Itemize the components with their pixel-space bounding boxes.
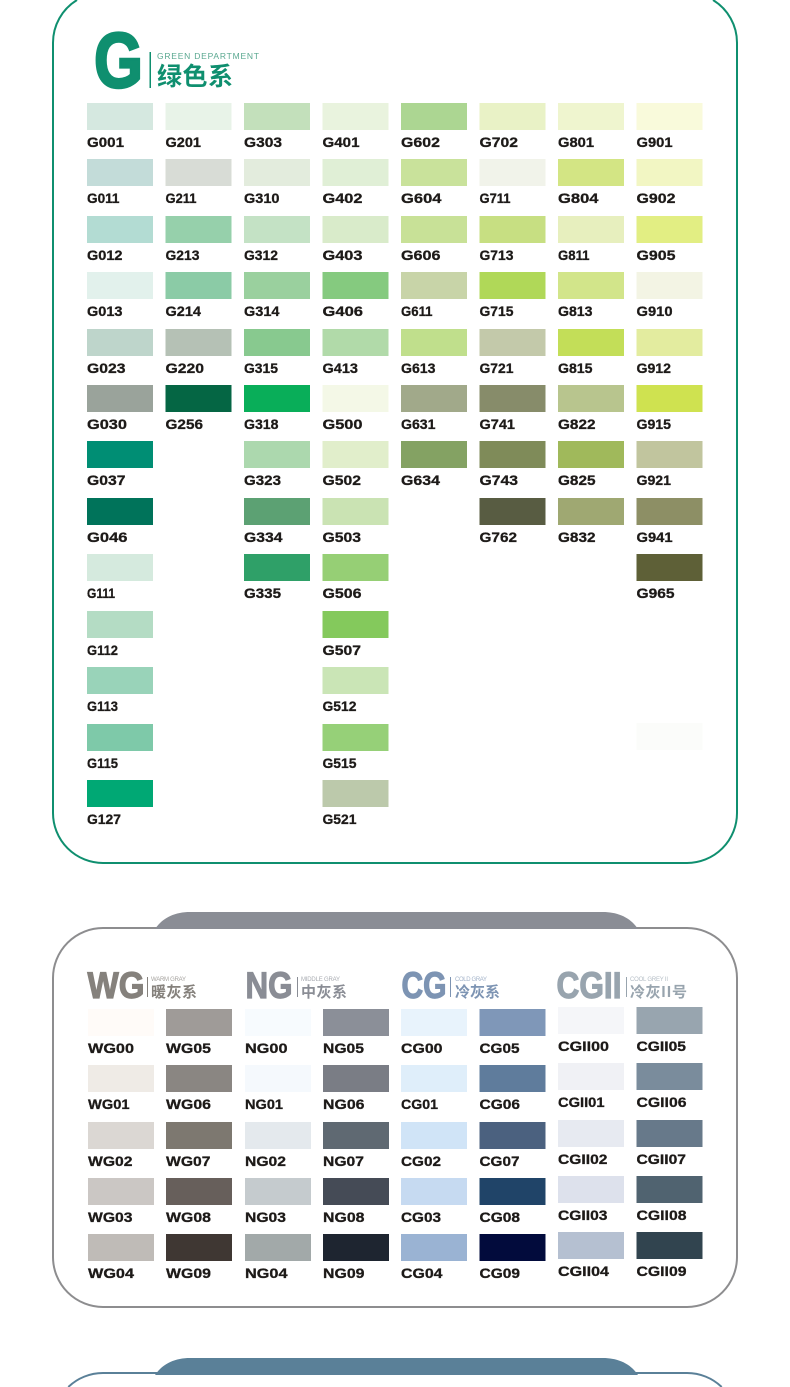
swatch G030: G030	[87, 416, 127, 432]
swatch CG03	[401, 1178, 467, 1225]
swatch CG02: CG02	[401, 1153, 441, 1169]
swatch G013: G013	[87, 303, 123, 319]
swatch G941: G941	[636, 529, 673, 545]
swatch NG03	[245, 1178, 311, 1225]
swatch NG00	[245, 1009, 311, 1056]
swatch G521: G521	[322, 811, 357, 827]
swatch G804: G804	[558, 190, 599, 206]
swatch G335	[244, 554, 310, 601]
swatch WG09	[166, 1234, 232, 1281]
swatch CGII02: CGII02	[558, 1151, 608, 1167]
heading: green department: GREEN DEPARTMENT	[157, 51, 259, 61]
swatch CG00: CG00	[401, 1040, 443, 1056]
swatch NG05: NG05	[323, 1040, 364, 1056]
swatch G037: G037	[87, 472, 126, 488]
swatch G001	[87, 103, 153, 150]
swatch G046	[87, 498, 153, 545]
swatch CGII03: CGII03	[558, 1207, 608, 1223]
swatch G314: G314	[244, 303, 280, 319]
swatch G507	[322, 611, 388, 658]
swatch CGII09: CGII09	[636, 1263, 687, 1279]
swatch CG08	[480, 1178, 546, 1225]
heading: cool grey II	[556, 965, 687, 1006]
swatch G602: G602	[401, 134, 440, 150]
swatch G713	[480, 216, 546, 263]
swatch CG08: CG08	[480, 1209, 520, 1225]
swatch WG03	[88, 1178, 154, 1225]
swatch G406	[322, 272, 388, 319]
swatch WG00	[88, 1009, 154, 1056]
swatch G403	[322, 216, 388, 263]
swatch NG04	[245, 1234, 311, 1281]
swatch G318: G318	[244, 416, 279, 432]
swatch G001: G001	[87, 134, 124, 150]
swatch WG02: WG02	[88, 1153, 133, 1169]
swatch CGII04: CGII04	[558, 1263, 609, 1279]
swatch CGII00	[558, 1007, 624, 1054]
swatch G702	[480, 103, 546, 150]
swatch G901	[636, 103, 702, 150]
swatch G832: G832	[558, 529, 596, 545]
swatch G711: G711	[480, 190, 511, 206]
swatch WG00: WG00	[88, 1040, 134, 1056]
swatch G220	[166, 329, 232, 376]
swatch NG01	[245, 1065, 311, 1112]
swatch G500: G500	[322, 416, 363, 432]
swatch NG09	[323, 1234, 389, 1281]
swatch CGII06: CGII06	[636, 1094, 687, 1110]
swatch G811	[558, 216, 624, 263]
swatch G825	[558, 441, 624, 488]
swatch NG07: NG07	[323, 1153, 364, 1169]
heading: warm gray: WARM GRAY	[151, 977, 186, 983]
swatch CG07	[480, 1122, 546, 1169]
swatch NG08: NG08	[323, 1209, 365, 1225]
swatch G832	[558, 498, 624, 545]
swatch G012: G012	[87, 247, 123, 263]
heading: cold gray	[402, 965, 500, 1006]
heading: warm gray: 暖灰系	[151, 981, 197, 1002]
swatch G915: G915	[636, 416, 671, 432]
swatch WG01: WG01	[88, 1096, 130, 1112]
heading: cold gray: COLD GRAY	[455, 977, 487, 983]
swatch CGII01	[558, 1063, 624, 1110]
swatch G046: G046	[87, 529, 128, 545]
swatch G506	[322, 554, 388, 601]
swatch CG05: CG05	[480, 1040, 520, 1056]
swatch G112	[87, 611, 153, 658]
panel: next section, cropped at page bottom	[68, 1358, 722, 1387]
swatch G965: G965	[636, 585, 675, 601]
swatch G813: G813	[558, 303, 593, 319]
swatch G611	[401, 272, 467, 319]
swatch G910	[636, 272, 702, 319]
swatch WG06	[166, 1065, 232, 1112]
swatch G521	[322, 780, 388, 827]
swatch G030	[87, 385, 153, 432]
swatch G113: G113	[87, 698, 118, 714]
swatch G910: G910	[636, 303, 673, 319]
swatch G606: G606	[401, 247, 441, 263]
heading: green department	[94, 16, 259, 104]
swatch G213: G213	[166, 247, 200, 263]
swatch G312	[244, 216, 310, 263]
swatch G715: G715	[480, 303, 514, 319]
heading: cool grey II: CGII	[556, 965, 622, 1006]
swatch WG08: WG08	[166, 1209, 211, 1225]
swatch G502	[322, 441, 388, 488]
swatch G211: G211	[166, 190, 197, 206]
swatch G413	[322, 329, 388, 376]
swatch G901: G901	[636, 134, 673, 150]
swatch G905: G905	[636, 247, 676, 263]
swatch WG02	[88, 1122, 154, 1169]
swatch CG06: CG06	[480, 1096, 520, 1112]
swatch G503	[322, 498, 388, 545]
heading: middle gray: NG	[246, 965, 292, 1006]
swatch G743	[480, 441, 546, 488]
swatch G721	[480, 329, 546, 376]
swatch G214: G214	[166, 303, 201, 319]
swatch G502: G502	[322, 472, 361, 488]
swatch G303: G303	[244, 134, 282, 150]
swatch G815: G815	[558, 360, 593, 376]
swatch G011: G011	[87, 190, 120, 206]
swatch G318	[244, 385, 310, 432]
swatch CGII08: CGII08	[636, 1207, 687, 1223]
swatch G127	[87, 780, 153, 827]
panel: green department	[53, 0, 737, 863]
heading: cool grey II: 冷灰II号	[630, 981, 687, 1002]
swatch CGII05	[636, 1007, 702, 1054]
swatch WG08	[166, 1178, 232, 1225]
swatch G902: G902	[636, 190, 676, 206]
swatch G721: G721	[480, 360, 514, 376]
swatch G023	[87, 329, 153, 376]
swatch CG06	[480, 1065, 546, 1112]
swatch CG00	[401, 1009, 467, 1056]
swatch G403: G403	[322, 247, 363, 263]
swatch G902	[636, 159, 702, 206]
heading: middle gray: 中灰系	[301, 981, 347, 1002]
swatch G334: G334	[244, 529, 283, 545]
swatch G012	[87, 216, 153, 263]
swatch G314	[244, 272, 310, 319]
swatch WG01	[88, 1065, 154, 1112]
swatch NG01: NG01	[245, 1096, 283, 1112]
swatch CGII06	[636, 1063, 702, 1110]
swatch G127: G127	[87, 811, 121, 827]
swatch CGII01: CGII01	[558, 1094, 605, 1110]
swatch G822	[558, 385, 624, 432]
swatch CGII07: CGII07	[636, 1151, 686, 1167]
heading: cool grey II: COOL GREY II	[630, 977, 668, 983]
swatch G315	[244, 329, 310, 376]
heading: warm gray: WG	[88, 965, 144, 1006]
swatch G503: G503	[322, 529, 361, 545]
swatch G512: G512	[322, 698, 357, 714]
panel outline: gray	[53, 928, 737, 1307]
swatch G715	[480, 272, 546, 319]
swatch G602	[401, 103, 467, 150]
swatch G310: G310	[244, 190, 280, 206]
swatch NG00: NG00	[245, 1040, 288, 1056]
swatch G211	[166, 159, 232, 206]
swatch G023: G023	[87, 360, 126, 376]
swatch G815	[558, 329, 624, 376]
panel: gray departments	[53, 912, 737, 1307]
swatch G801	[558, 103, 624, 150]
swatch G613	[401, 329, 467, 376]
swatch NG06: NG06	[323, 1096, 365, 1112]
swatch CG09	[480, 1234, 546, 1281]
swatch G214	[166, 272, 232, 319]
swatch WG09: WG09	[166, 1265, 211, 1281]
swatch G402: G402	[322, 190, 363, 206]
swatch CGII03	[558, 1176, 624, 1223]
swatch G037	[87, 441, 153, 488]
swatch G631: G631	[401, 416, 436, 432]
heading: cold gray: CG	[402, 965, 446, 1006]
swatch NG09: NG09	[323, 1265, 365, 1281]
swatch G921	[636, 441, 702, 488]
heading: cold gray: 冷灰系	[455, 981, 500, 1002]
swatch CGII02	[558, 1120, 624, 1167]
swatch WG07: WG07	[166, 1153, 211, 1169]
swatch G111: G111	[87, 585, 115, 601]
swatch G115: G115	[87, 755, 118, 771]
heading: warm gray	[88, 965, 197, 1006]
swatch CG04	[401, 1234, 467, 1281]
swatch CG07: CG07	[480, 1153, 520, 1169]
heading: green department: 绿色系	[157, 57, 233, 93]
swatch G711	[480, 159, 546, 206]
swatch CG03: CG03	[401, 1209, 441, 1225]
swatch G220: G220	[166, 360, 204, 376]
swatch CG09: CG09	[480, 1265, 520, 1281]
swatch NG04: NG04	[245, 1265, 288, 1281]
swatch G112: G112	[87, 642, 118, 658]
swatch WG06: WG06	[166, 1096, 211, 1112]
swatch WG07	[166, 1122, 232, 1169]
swatch NG02: NG02	[245, 1153, 286, 1169]
swatch G743: G743	[480, 472, 518, 488]
swatch CGII07	[636, 1120, 702, 1167]
swatch G515: G515	[322, 755, 357, 771]
swatch G813	[558, 272, 624, 319]
swatch G515	[322, 724, 388, 771]
swatch G741: G741	[480, 416, 515, 432]
tab: gray panel	[155, 912, 638, 929]
swatch G413: G413	[322, 360, 358, 376]
swatch CGII08	[636, 1176, 702, 1223]
swatch G310	[244, 159, 310, 206]
swatch WG04: WG04	[88, 1265, 134, 1281]
swatch G634	[401, 441, 467, 488]
swatch G606	[401, 216, 467, 263]
swatch G507: G507	[322, 642, 361, 658]
swatch G915	[636, 385, 702, 432]
swatch G604: G604	[401, 190, 442, 206]
swatch NG02	[245, 1122, 311, 1169]
swatch CGII04	[558, 1232, 624, 1279]
swatch G912	[636, 329, 702, 376]
swatch G804	[558, 159, 624, 206]
swatch G256	[166, 385, 232, 432]
swatch G921: G921	[636, 472, 671, 488]
tab: blue panel	[155, 1358, 638, 1375]
swatch G905	[636, 216, 702, 263]
swatch G611: G611	[401, 303, 433, 319]
swatch G256: G256	[166, 416, 203, 432]
swatch WG05	[166, 1009, 232, 1056]
swatch G315: G315	[244, 360, 278, 376]
swatch NG06	[323, 1065, 389, 1112]
swatch CG02	[401, 1122, 467, 1169]
swatch G013	[87, 272, 153, 319]
swatch CG05	[480, 1009, 546, 1056]
swatch G303	[244, 103, 310, 150]
swatch G713: G713	[480, 247, 514, 263]
swatch NG03: NG03	[245, 1209, 286, 1225]
swatch G801: G801	[558, 134, 594, 150]
swatch G115	[87, 724, 153, 771]
swatch CGII00: CGII00	[558, 1038, 609, 1054]
panel outline: blue	[68, 1373, 722, 1387]
swatch G811: G811	[558, 247, 590, 263]
swatch G613: G613	[401, 360, 436, 376]
swatch G912: G912	[636, 360, 671, 376]
swatch CGII09	[636, 1232, 702, 1279]
swatch G312: G312	[244, 247, 278, 263]
swatch NG07	[323, 1122, 389, 1169]
heading: middle gray: MIDDLE GRAY	[301, 977, 340, 983]
swatch CGII05: CGII05	[636, 1038, 686, 1054]
swatch G965	[636, 554, 702, 601]
swatch G822: G822	[558, 416, 596, 432]
swatch WG03: WG03	[88, 1209, 133, 1225]
swatch G323: G323	[244, 472, 281, 488]
swatch CG04: CG04	[401, 1265, 443, 1281]
swatch G762	[480, 498, 546, 545]
swatch NG05	[323, 1009, 389, 1056]
swatch G401	[322, 103, 388, 150]
swatch G512	[322, 667, 388, 714]
swatch G941	[636, 498, 702, 545]
swatch: faint unlabelled	[636, 723, 702, 750]
swatch G402	[322, 159, 388, 206]
swatch G500	[322, 385, 388, 432]
swatch G323	[244, 441, 310, 488]
swatch G406: G406	[322, 303, 363, 319]
swatch G634: G634	[401, 472, 440, 488]
swatch G741	[480, 385, 546, 432]
swatch G201: G201	[166, 134, 201, 150]
swatch G702: G702	[480, 134, 518, 150]
swatch G762: G762	[480, 529, 517, 545]
swatch NG08	[323, 1178, 389, 1225]
swatch G201	[166, 103, 232, 150]
swatch WG04	[88, 1234, 154, 1281]
heading: green department: G	[94, 16, 143, 104]
swatch G631	[401, 385, 467, 432]
heading: middle gray	[246, 965, 347, 1006]
swatch G604	[401, 159, 467, 206]
swatch G825: G825	[558, 472, 596, 488]
swatch CG01	[401, 1065, 467, 1112]
swatch CG01: CG01	[401, 1096, 438, 1112]
swatch G401: G401	[322, 134, 360, 150]
swatch WG05: WG05	[166, 1040, 211, 1056]
swatch G113	[87, 667, 153, 714]
swatch G334	[244, 498, 310, 545]
swatch G506: G506	[322, 585, 362, 601]
swatch G011	[87, 159, 153, 206]
swatch G213	[166, 216, 232, 263]
swatch G111	[87, 554, 153, 601]
swatch G335: G335	[244, 585, 281, 601]
